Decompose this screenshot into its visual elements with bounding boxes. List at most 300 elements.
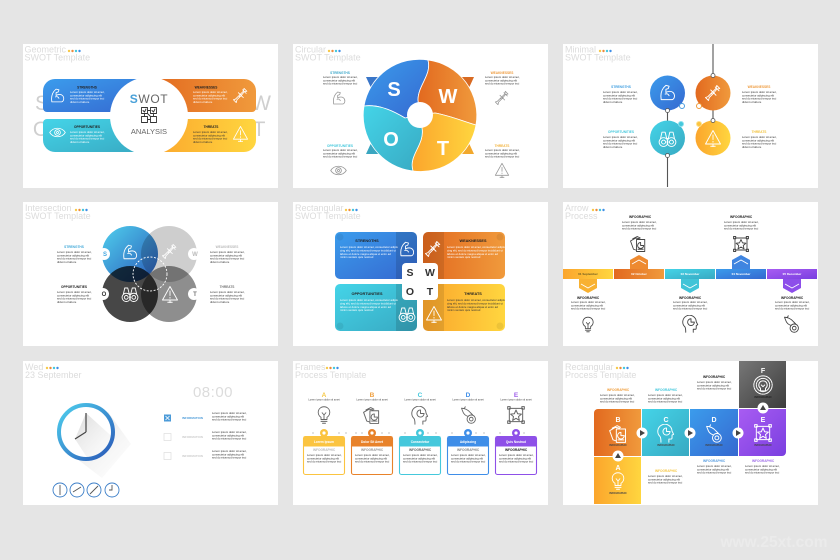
- text: opportunities: sed do eiusmod tempor inci: [57, 297, 92, 301]
- frame C: [400, 392, 440, 474]
- card: weaknesses: Lorem ipsum dolor sit amet, consectetur adipis: [447, 245, 505, 249]
- play and up arrow badges: [612, 402, 768, 462]
- frame C: sed do eiusmod tempor inci: [403, 460, 438, 464]
- text: opportunities: consectetur adipiscing elit: [603, 138, 635, 142]
- text: threats: didunt ut labore: [742, 145, 762, 149]
- frame B: INFOGRAPHIC: [361, 448, 384, 452]
- center badge: SWOT analysis: SWOT: [130, 92, 168, 106]
- card: strengths: minim veniam quis nostrud: [340, 255, 374, 259]
- text above B: Lorem ipsum dolor sit amet,: [600, 393, 635, 397]
- text: weaknesses: didunt ut labore: [742, 100, 762, 104]
- text: weaknesses: Lorem ipsum dolor sit amet,: [485, 75, 520, 79]
- text below D: [697, 459, 732, 475]
- node: opportunities: [650, 120, 685, 158]
- text: opportunities: OPPORTUNITIES: [608, 130, 634, 134]
- tile A: A: [615, 465, 621, 472]
- checklist row 1: [164, 411, 247, 422]
- step 4 blue: [716, 215, 766, 279]
- text: strengths: sed do eiusmod tempor inci: [57, 257, 92, 261]
- checklist row 3: Lorem ipsum dolor sit amet,: [212, 449, 247, 453]
- tile D: [690, 409, 738, 456]
- text: weaknesses: consectetur adipiscing elit: [742, 93, 774, 97]
- title: date: 23 September: [25, 370, 82, 380]
- title: rectangular: Rectangular: [295, 203, 344, 213]
- text: threats: consectetur adipiscing elit: [485, 151, 517, 155]
- text: strengths: Lorem ipsum dolor sit amet,: [57, 250, 92, 254]
- title: geometric: [24, 44, 90, 62]
- panel: geometric SWOT template: [23, 44, 278, 188]
- panel: rectangular process template: [563, 361, 818, 505]
- frame A: sed do eiusmod tempor inci: [307, 460, 342, 464]
- text above C: [648, 388, 683, 404]
- text: opportunities: Lorem ipsum dolor sit amet,: [57, 290, 92, 294]
- card: opportunities: minim veniam quis nostrud: [340, 308, 374, 312]
- step 2 orange: Lorem ipsum dolor sit amet,: [622, 220, 657, 224]
- panel: date and clock: [23, 361, 278, 505]
- tile B: INFOGRAPHIC: [609, 444, 627, 447]
- frame C: Lorem ipsum dolor sit amet,: [403, 453, 438, 457]
- text: strengths: consectetur adipiscing elit: [603, 93, 635, 97]
- step 4 blue: INFOGRAPHIC: [730, 215, 753, 219]
- bar: opportunities: sed do eiusmod tempor inci: [70, 137, 105, 141]
- text: threats: didunt ut labore: [210, 300, 230, 304]
- bar: opportunities: [43, 119, 150, 152]
- quadrant: S: S: [387, 79, 401, 101]
- background letters: O: [33, 118, 49, 141]
- text above C: consectetur adipiscing elit: [648, 396, 680, 400]
- bar: threats: THREATS: [204, 125, 218, 129]
- digital time: 08:00: [193, 384, 233, 401]
- tile C: C: [663, 417, 669, 424]
- background letters: W: [251, 92, 271, 115]
- frame A: consectetur adipiscing elit: [307, 456, 339, 460]
- step 1 yellow: consectetur adipiscing elit: [571, 303, 603, 307]
- bar: threats: [150, 119, 256, 152]
- text: opportunities: didunt ut labore: [603, 145, 623, 149]
- frame E: sed do eiusmod tempor inci: [499, 460, 534, 464]
- tile B: [594, 409, 641, 456]
- title: intersection: SWOT Template: [25, 211, 91, 221]
- card: weaknesses: WEAKNESSES: [459, 239, 487, 243]
- title: circular: [295, 44, 361, 62]
- node: weaknesses: [696, 74, 730, 110]
- frame B: consectetur adipiscing elit: [355, 456, 387, 460]
- title: date: [25, 362, 82, 380]
- title: frames: [295, 362, 366, 380]
- connector lines: [668, 44, 713, 187]
- text: weaknesses: [485, 71, 520, 105]
- text below E: sed do eiusmod tempor inci: [745, 471, 780, 475]
- text: strengths: sed do eiusmod tempor inci: [323, 82, 358, 86]
- text: threats: sed do eiusmod tempor inci: [742, 142, 777, 146]
- checklist row 1: INFORMATION: [182, 416, 203, 420]
- checklist row 3: consectetur adipiscing elit: [212, 452, 244, 456]
- text: opportunities: OPPORTUNITIES: [327, 144, 353, 148]
- text: threats: THREATS: [495, 144, 509, 148]
- text: strengths: [323, 71, 358, 104]
- bar: weaknesses: Lorem ipsum dolor sit amet,: [193, 90, 228, 94]
- bar: threats: Lorem ipsum dolor sit amet,: [193, 130, 228, 134]
- frame A: INFOGRAPHIC: [313, 448, 336, 452]
- step 3 teal: 03 November: [681, 272, 700, 276]
- quadrant: T: [412, 113, 476, 172]
- quadrant: W: W: [439, 86, 458, 108]
- dashed center circle: [133, 257, 167, 291]
- title: minimal: Minimal: [565, 44, 596, 54]
- title: rectangular process: [565, 362, 636, 380]
- title: rectangular process: Rectangular: [565, 362, 614, 372]
- step 4 blue: sed do eiusmod tempor inci: [724, 227, 759, 231]
- bar: weaknesses: [150, 79, 256, 112]
- text: strengths: STRENGTHS: [64, 245, 84, 249]
- letter badges: S: [103, 252, 107, 258]
- card: strengths: labore et dolore magna aliqua ut enim ad: [340, 252, 391, 256]
- frame E: Lorem ipsum dolor sit amet: [500, 398, 532, 402]
- tile F: INFOGRAPHIC: [754, 396, 772, 399]
- text: threats: consectetur adipiscing elit: [210, 293, 242, 297]
- card: opportunities: Lorem ipsum dolor sit amet, consectetur adipis: [340, 298, 398, 302]
- panel: arrow process: [563, 202, 818, 346]
- bar: threats: sed do eiusmod tempor inci: [193, 137, 228, 141]
- frame D: Lorem ipsum dolor sit amet: [452, 398, 484, 402]
- card: threats: cing elit, sed do eiusmod tempor incididunt ut: [447, 301, 503, 305]
- checklist row 1: Lorem ipsum dolor sit amet,: [212, 411, 247, 415]
- background letters: [33, 92, 271, 141]
- bar: strengths: [43, 79, 150, 112]
- text above D: consectetur adipiscing elit: [697, 383, 729, 387]
- checklist row 2: INFORMATION: [182, 435, 203, 439]
- title: intersection: [25, 203, 91, 221]
- text: threats: Lorem ipsum dolor sit amet,: [485, 148, 520, 152]
- text above C: INFOGRAPHIC: [655, 388, 678, 392]
- step 3 teal: Lorem ipsum dolor sit amet,: [673, 300, 708, 304]
- tile B: B: [615, 417, 621, 424]
- tile F: F: [761, 368, 766, 375]
- checklist row 2: [164, 430, 247, 441]
- card: strengths: STRENGTHS: [355, 239, 379, 243]
- bar: weaknesses: consectetur adipiscing elit: [193, 93, 225, 97]
- bar: strengths: STRENGTHS: [77, 86, 97, 90]
- tile E: [739, 409, 786, 456]
- step 5 purple: consectetur adipiscing elit: [775, 303, 807, 307]
- frame A: Lorem ipsum dolor sit amet,: [307, 453, 342, 457]
- bar: strengths: sed do eiusmod tempor inci: [70, 97, 105, 101]
- tile C: INFOGRAPHIC: [657, 444, 675, 447]
- bar: weaknesses: sed do eiusmod tempor inci: [193, 97, 228, 101]
- text: weaknesses: Lorem ipsum dolor sit amet,: [742, 90, 777, 94]
- frame B: B: [370, 392, 375, 399]
- text: strengths: [57, 245, 92, 264]
- step 1 yellow: 01 September: [578, 272, 599, 276]
- text below D: consectetur adipiscing elit: [697, 467, 729, 471]
- letter badges: W: [192, 252, 198, 258]
- text: strengths: consectetur adipiscing elit: [323, 78, 355, 82]
- step 5 purple: 05 December: [783, 272, 802, 276]
- step 2 orange: sed do eiusmod tempor inci: [622, 227, 657, 231]
- bar: strengths: didunt ut labore: [70, 100, 90, 104]
- panel: intersection SWOT template: [23, 202, 278, 346]
- text: weaknesses: Lorem ipsum dolor sit amet,: [210, 250, 245, 254]
- panel: minimal SWOT template: [563, 44, 818, 188]
- frame E: E: [514, 392, 519, 399]
- text: strengths: sed do eiusmod tempor inci: [603, 97, 638, 101]
- bar: strengths: consectetur adipiscing elit: [70, 93, 102, 97]
- bar: opportunities: consectetur adipiscing elit: [70, 133, 102, 137]
- title: circular: SWOT Template: [295, 52, 361, 62]
- letter badges: T: [193, 292, 197, 298]
- frame E: Quis Nostrud: [506, 440, 526, 444]
- text above C: sed do eiusmod tempor inci: [648, 400, 683, 404]
- quadrant: O: [363, 106, 422, 171]
- text: threats: [210, 285, 245, 304]
- text above D: Lorem ipsum dolor sit amet,: [697, 380, 732, 384]
- frame D: D: [466, 392, 471, 399]
- text: strengths: didunt ut labore: [57, 260, 77, 264]
- background letters: S: [35, 92, 49, 115]
- text: weaknesses: sed do eiusmod tempor inci: [485, 82, 520, 86]
- card: threats: minim veniam quis nostrud: [447, 308, 481, 312]
- title: rectangular: SWOT Template: [295, 211, 361, 221]
- center badge: SWOT analysis: [110, 77, 188, 155]
- checklist row 2: consectetur adipiscing elit: [212, 433, 244, 437]
- title: geometric: Geometric: [24, 44, 67, 54]
- text: threats: sed do eiusmod tempor inci: [485, 155, 520, 159]
- text: weaknesses: sed do eiusmod tempor inci: [210, 257, 245, 261]
- card: weaknesses: cing elit, sed do eiusmod tempor incididunt ut: [447, 248, 503, 252]
- frame B: Lorem ipsum dolor sit amet: [356, 398, 388, 402]
- text: threats: sed do eiusmod tempor inci: [210, 297, 245, 301]
- card: weaknesses: labore et dolore magna aliqua ut enim ad: [447, 252, 498, 256]
- text: weaknesses: didunt ut labore: [210, 260, 230, 264]
- panel: frames process template: [293, 361, 548, 505]
- step 2 orange: 02 October: [631, 272, 648, 276]
- frame B: [352, 392, 392, 474]
- text beside A: [648, 469, 683, 485]
- bar: threats: consectetur adipiscing elit: [193, 133, 225, 137]
- step 2 orange: INFOGRAPHIC: [629, 215, 652, 219]
- text: weaknesses: [210, 245, 245, 264]
- frame D: Lorem ipsum dolor sit amet,: [451, 453, 486, 457]
- bar: strengths: Lorem ipsum dolor sit amet,: [70, 90, 105, 94]
- text: opportunities: [603, 130, 638, 149]
- card: threats: labore et dolore magna aliqua ut enim ad: [447, 305, 498, 309]
- text above D: sed do eiusmod tempor inci: [697, 387, 732, 391]
- step 2 orange: [614, 215, 664, 279]
- frame C: Lorem ipsum dolor sit amet: [404, 398, 436, 402]
- bar: opportunities: Lorem ipsum dolor sit amet,: [70, 130, 105, 134]
- venn icons: [122, 244, 178, 303]
- watermark: www.25xt.com: [719, 534, 828, 551]
- text: opportunities: [57, 285, 92, 304]
- card: opportunities: labore et dolore magna aliqua ut enim ad: [340, 305, 391, 309]
- quadrant: S: [364, 59, 429, 118]
- title: geometric: SWOT Template: [24, 52, 90, 62]
- text below E: INFOGRAPHIC: [752, 459, 775, 463]
- frame C: INFOGRAPHIC: [409, 448, 432, 452]
- quadrant: W: [418, 60, 477, 125]
- card: weaknesses: minim veniam quis nostrud: [447, 255, 481, 259]
- node: threats: [696, 118, 730, 156]
- title: arrow process: Arrow: [565, 203, 589, 213]
- frame A: Lorem ipsum dolor sit amet: [308, 398, 340, 402]
- letter badges: O: [102, 292, 107, 298]
- step 3 teal: sed do eiusmod tempor inci: [673, 307, 708, 311]
- step 3 teal: INFOGRAPHIC: [679, 296, 702, 300]
- text below E: [745, 459, 780, 475]
- center letter tile: S: [406, 267, 414, 279]
- letter badges: [97, 248, 200, 300]
- frame B: Lorem ipsum dolor sit amet,: [355, 453, 390, 457]
- card: strengths: cing elit, sed do eiusmod tempor incididunt ut: [340, 248, 396, 252]
- checklist row 1: sed do eiusmod tempor inci: [212, 418, 247, 422]
- text: threats: THREATS: [220, 285, 234, 289]
- text: opportunities: Lorem ipsum dolor sit amet,: [323, 148, 358, 152]
- step 3 teal: [665, 269, 715, 332]
- title: intersection: Intersection: [25, 203, 72, 213]
- text: weaknesses: consectetur adipiscing elit: [210, 253, 242, 257]
- card: strengths: [335, 232, 417, 279]
- tile D: INFOGRAPHIC: [705, 444, 723, 447]
- card: strengths: Lorem ipsum dolor sit amet, consectetur adipis: [340, 245, 398, 249]
- text above B: consectetur adipiscing elit: [600, 396, 632, 400]
- center letter tile: O: [406, 286, 414, 298]
- title: rectangular process: Process Template: [565, 370, 636, 380]
- text: threats: consectetur adipiscing elit: [742, 138, 774, 142]
- text: opportunities: [323, 144, 358, 175]
- text: weaknesses: consectetur adipiscing elit: [485, 78, 517, 82]
- frame E: INFOGRAPHIC: [505, 448, 528, 452]
- quadrant: T: T: [437, 138, 449, 160]
- checklist row 2: sed do eiusmod tempor inci: [212, 437, 247, 441]
- text above B: sed do eiusmod tempor inci: [600, 400, 635, 404]
- text: opportunities: Lorem ipsum dolor sit amet,: [603, 135, 638, 139]
- step 5 purple: Lorem ipsum dolor sit amet,: [775, 300, 810, 304]
- text above C: Lorem ipsum dolor sit amet,: [648, 393, 683, 397]
- background letters: T: [253, 118, 266, 141]
- card: opportunities: [335, 284, 417, 331]
- venn circles: [102, 226, 197, 322]
- frame C: C: [418, 392, 423, 399]
- checklist row 3: INFORMATION: [182, 454, 203, 458]
- text below D: Lorem ipsum dolor sit amet,: [697, 464, 732, 468]
- checklist row 3: sed do eiusmod tempor inci: [212, 456, 247, 460]
- bar: opportunities: didunt ut labore: [70, 140, 90, 144]
- frame E: consectetur adipiscing elit: [499, 456, 531, 460]
- text above B: [600, 388, 635, 404]
- text: opportunities: consectetur adipiscing elit: [57, 293, 89, 297]
- text: weaknesses: sed do eiusmod tempor inci: [742, 97, 777, 101]
- text: weaknesses: WEAKNESSES: [216, 245, 238, 249]
- text: strengths: [603, 85, 638, 104]
- mini clocks: [53, 483, 119, 497]
- text below D: sed do eiusmod tempor inci: [697, 471, 732, 475]
- title: arrow process: Process: [565, 211, 598, 221]
- checklist row 2: Lorem ipsum dolor sit amet,: [212, 430, 247, 434]
- bar: opportunities: OPPORTUNITIES: [74, 125, 100, 129]
- tile E: INFOGRAPHIC: [754, 444, 772, 447]
- text below D: INFOGRAPHIC: [703, 459, 726, 463]
- text below E: consectetur adipiscing elit: [745, 467, 777, 471]
- text: opportunities: OPPORTUNITIES: [61, 285, 87, 289]
- tile D: D: [711, 417, 717, 424]
- frame E: Lorem ipsum dolor sit amet,: [499, 453, 534, 457]
- title: frames: Process Template: [295, 370, 366, 380]
- text: threats: Lorem ipsum dolor sit amet,: [210, 290, 245, 294]
- text beside A: sed do eiusmod tempor inci: [648, 481, 683, 485]
- text: opportunities: sed do eiusmod tempor inci: [323, 155, 358, 159]
- frame D: consectetur adipiscing elit: [451, 456, 483, 460]
- frame E: [496, 392, 536, 474]
- quadrant: O: O: [383, 129, 399, 151]
- step 4 blue: consectetur adipiscing elit: [724, 223, 756, 227]
- step 1 yellow: INFOGRAPHIC: [577, 296, 600, 300]
- corner triangles: [366, 77, 474, 154]
- text: opportunities: consectetur adipiscing elit: [323, 151, 355, 155]
- step 5 purple: sed do eiusmod tempor inci: [775, 307, 810, 311]
- panel: circular SWOT template: [293, 44, 548, 188]
- text above D: INFOGRAPHIC: [703, 375, 726, 379]
- text: strengths: Lorem ipsum dolor sit amet,: [603, 90, 638, 94]
- center letter tile: W: [425, 267, 435, 279]
- checklist row 1: consectetur adipiscing elit: [212, 414, 244, 418]
- title: frames: Frames: [295, 362, 326, 372]
- frame C: consectetur adipiscing elit: [403, 456, 435, 460]
- step 4 blue: 04 November: [732, 272, 751, 276]
- text: strengths: consectetur adipiscing elit: [57, 253, 89, 257]
- title: rectangular: [295, 203, 361, 221]
- text above D: [697, 375, 732, 391]
- step 2 orange: consectetur adipiscing elit: [622, 223, 654, 227]
- center badge: SWOT analysis: ANALYSIS: [131, 127, 167, 136]
- tile A: INFOGRAPHIC: [609, 492, 627, 495]
- text: threats: [485, 144, 520, 178]
- checklist row 3: [164, 449, 247, 460]
- text: threats: THREATS: [752, 130, 766, 134]
- card: opportunities: cing elit, sed do eiusmod tempor incididunt ut: [340, 301, 396, 305]
- frame D: sed do eiusmod tempor inci: [451, 460, 486, 464]
- frame B: sed do eiusmod tempor inci: [355, 460, 390, 464]
- frame D: INFOGRAPHIC: [457, 448, 480, 452]
- step 3 teal: consectetur adipiscing elit: [673, 303, 705, 307]
- card: weaknesses: [423, 232, 505, 279]
- card: threats: THREATS: [464, 292, 482, 296]
- center letter tile: T: [427, 286, 434, 298]
- step 1 yellow: sed do eiusmod tempor inci: [571, 307, 606, 311]
- text: strengths: STRENGTHS: [330, 71, 350, 75]
- text: threats: Lorem ipsum dolor sit amet,: [742, 135, 777, 139]
- frame D: [448, 392, 488, 474]
- title: arrow process: [565, 203, 605, 221]
- frame A: A: [322, 392, 327, 399]
- step 1 yellow: Lorem ipsum dolor sit amet,: [571, 300, 606, 304]
- bar: weaknesses: WEAKNESSES: [195, 86, 217, 90]
- frame A: [304, 392, 344, 474]
- connector dots: [312, 432, 525, 434]
- text: strengths: STRENGTHS: [611, 85, 631, 89]
- frame D: Adipiscing: [460, 440, 476, 444]
- text below E: Lorem ipsum dolor sit amet,: [745, 464, 780, 468]
- card: threats: [423, 284, 505, 331]
- tile A: [594, 457, 641, 504]
- title: date: Wed: [25, 362, 43, 372]
- frame C: Consectetur: [411, 440, 430, 444]
- step 4 blue: Lorem ipsum dolor sit amet,: [724, 220, 759, 224]
- tile F: [739, 361, 786, 408]
- text: weaknesses: [742, 85, 777, 104]
- text: opportunities: didunt ut labore: [57, 300, 77, 304]
- frame A: Lorem Ipsum: [314, 440, 334, 444]
- text: weaknesses: WEAKNESSES: [748, 85, 770, 89]
